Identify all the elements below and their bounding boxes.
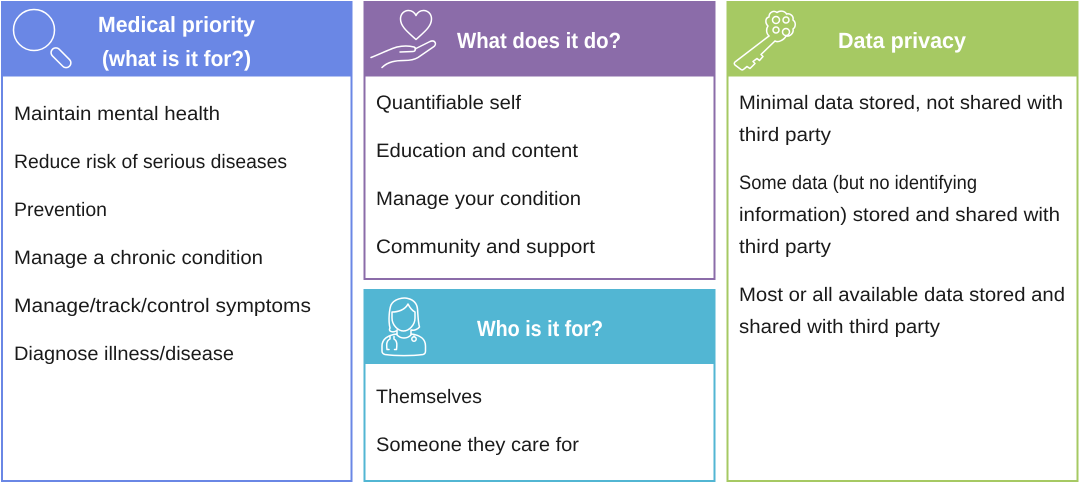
list: what it does — [376, 92, 596, 258]
list: what it does: Community and support — [376, 236, 596, 258]
icon: heart in hand — [371, 10, 435, 68]
list: data privacy levels: third party — [739, 124, 831, 146]
heading: data privacy: Data privacy — [838, 28, 967, 53]
list: data privacy levels: information) stored and shared with — [739, 204, 1060, 226]
heading: medical priority — [98, 12, 256, 71]
list: what it does: Manage your condition — [376, 188, 581, 210]
list: medical priorities: Maintain mental health — [14, 103, 220, 125]
list: data privacy levels — [739, 92, 1065, 338]
panel: data privacy — [726, 1, 1078, 481]
panel: medical priority — [1, 2, 352, 481]
list: medical priorities: Reduce risk of serious diseases — [14, 151, 287, 173]
list: medical priorities: Manage/track/control symptoms — [14, 295, 311, 317]
list: data privacy levels: third party — [739, 236, 831, 258]
icon: magnifying glass — [14, 10, 73, 70]
list: medical priorities — [14, 103, 311, 365]
list: medical priorities: Diagnose illness/disease — [14, 343, 234, 365]
panel: who is it for — [364, 290, 716, 481]
panel: what does it do — [364, 2, 716, 279]
list: who it is for: Someone they care for — [376, 434, 580, 456]
list: who it is for: Themselves — [376, 386, 482, 408]
list: medical priorities: Manage a chronic condition — [14, 247, 263, 269]
heading: what does it do: What does it do? — [457, 28, 621, 53]
list: data privacy levels: shared with third party — [739, 316, 940, 338]
list: data privacy levels: Some data (but no identifying — [739, 172, 977, 194]
list: who it is for — [376, 386, 580, 456]
list: what it does: Education and content — [376, 140, 579, 162]
heading: who is it for: Who is it for? — [477, 316, 603, 341]
list: medical priorities: Prevention — [14, 199, 107, 221]
list: data privacy levels: Most or all available data stored and — [739, 284, 1065, 306]
heading: medical priority: (what is it for?) — [102, 46, 251, 71]
icon: doctor — [382, 298, 426, 356]
list: data privacy levels: Minimal data stored, not shared with — [739, 92, 1063, 114]
heading: medical priority: Medical priority — [98, 12, 256, 37]
list: what it does: Quantifiable self — [376, 92, 522, 114]
icon: key — [734, 11, 795, 70]
